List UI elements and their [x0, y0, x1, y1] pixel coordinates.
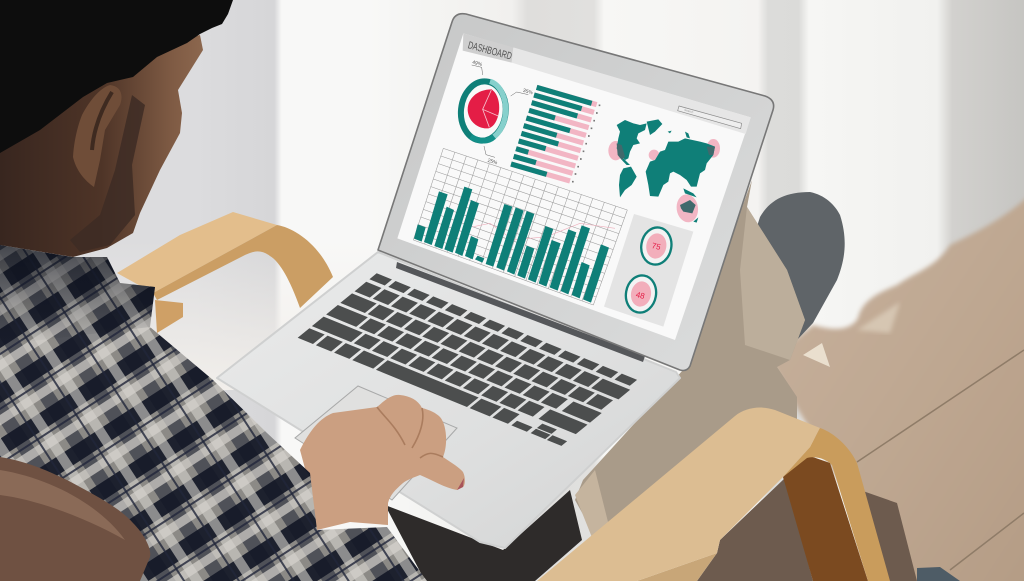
keyboard [300, 276, 637, 444]
seat cushion visible through arm [697, 478, 813, 581]
screen background [397, 33, 751, 340]
column bars [414, 187, 609, 303]
gauge panel [604, 214, 693, 327]
column chart grid [413, 148, 627, 305]
hand [300, 395, 465, 530]
laptop [217, 14, 774, 548]
dashboard title: DASHBOARD [467, 40, 513, 63]
beard [70, 95, 145, 252]
laptop lid [378, 14, 774, 371]
laptop base [217, 252, 680, 548]
dark shirt fabric under laptop [385, 490, 582, 581]
donut chart: 35% [522, 88, 534, 96]
horizontal stacked bar chart [511, 87, 600, 182]
face and neck [0, 35, 203, 257]
head [0, 0, 233, 257]
world map [608, 119, 720, 224]
donut chart [458, 59, 534, 166]
dashboard screen [397, 33, 751, 340]
chair arm left [117, 212, 333, 333]
trousers [575, 180, 805, 545]
gauge 48: 48 [635, 290, 646, 301]
slipper [740, 192, 845, 363]
donut callouts [472, 65, 528, 157]
dashboard title [463, 33, 513, 63]
pie [468, 89, 499, 128]
arm top face [537, 408, 820, 581]
search box: Search [684, 108, 694, 114]
arm underside tan band [637, 553, 717, 581]
ear [73, 85, 122, 187]
hair [0, 0, 233, 153]
trackpad [295, 386, 457, 500]
arm side band [783, 428, 890, 581]
plaid shirt [0, 245, 427, 581]
arm rim backing [783, 455, 868, 581]
chair arm right [537, 408, 960, 581]
search box [678, 106, 742, 129]
donut chart: 49% [471, 59, 483, 68]
column chart trend line [473, 223, 615, 240]
wood floor [770, 195, 1024, 581]
gauge 75: 75 [651, 241, 662, 252]
search strip [512, 47, 751, 134]
hinge bar [396, 262, 645, 362]
donut chart: 25% [487, 158, 499, 166]
chair cushion [0, 457, 150, 581]
